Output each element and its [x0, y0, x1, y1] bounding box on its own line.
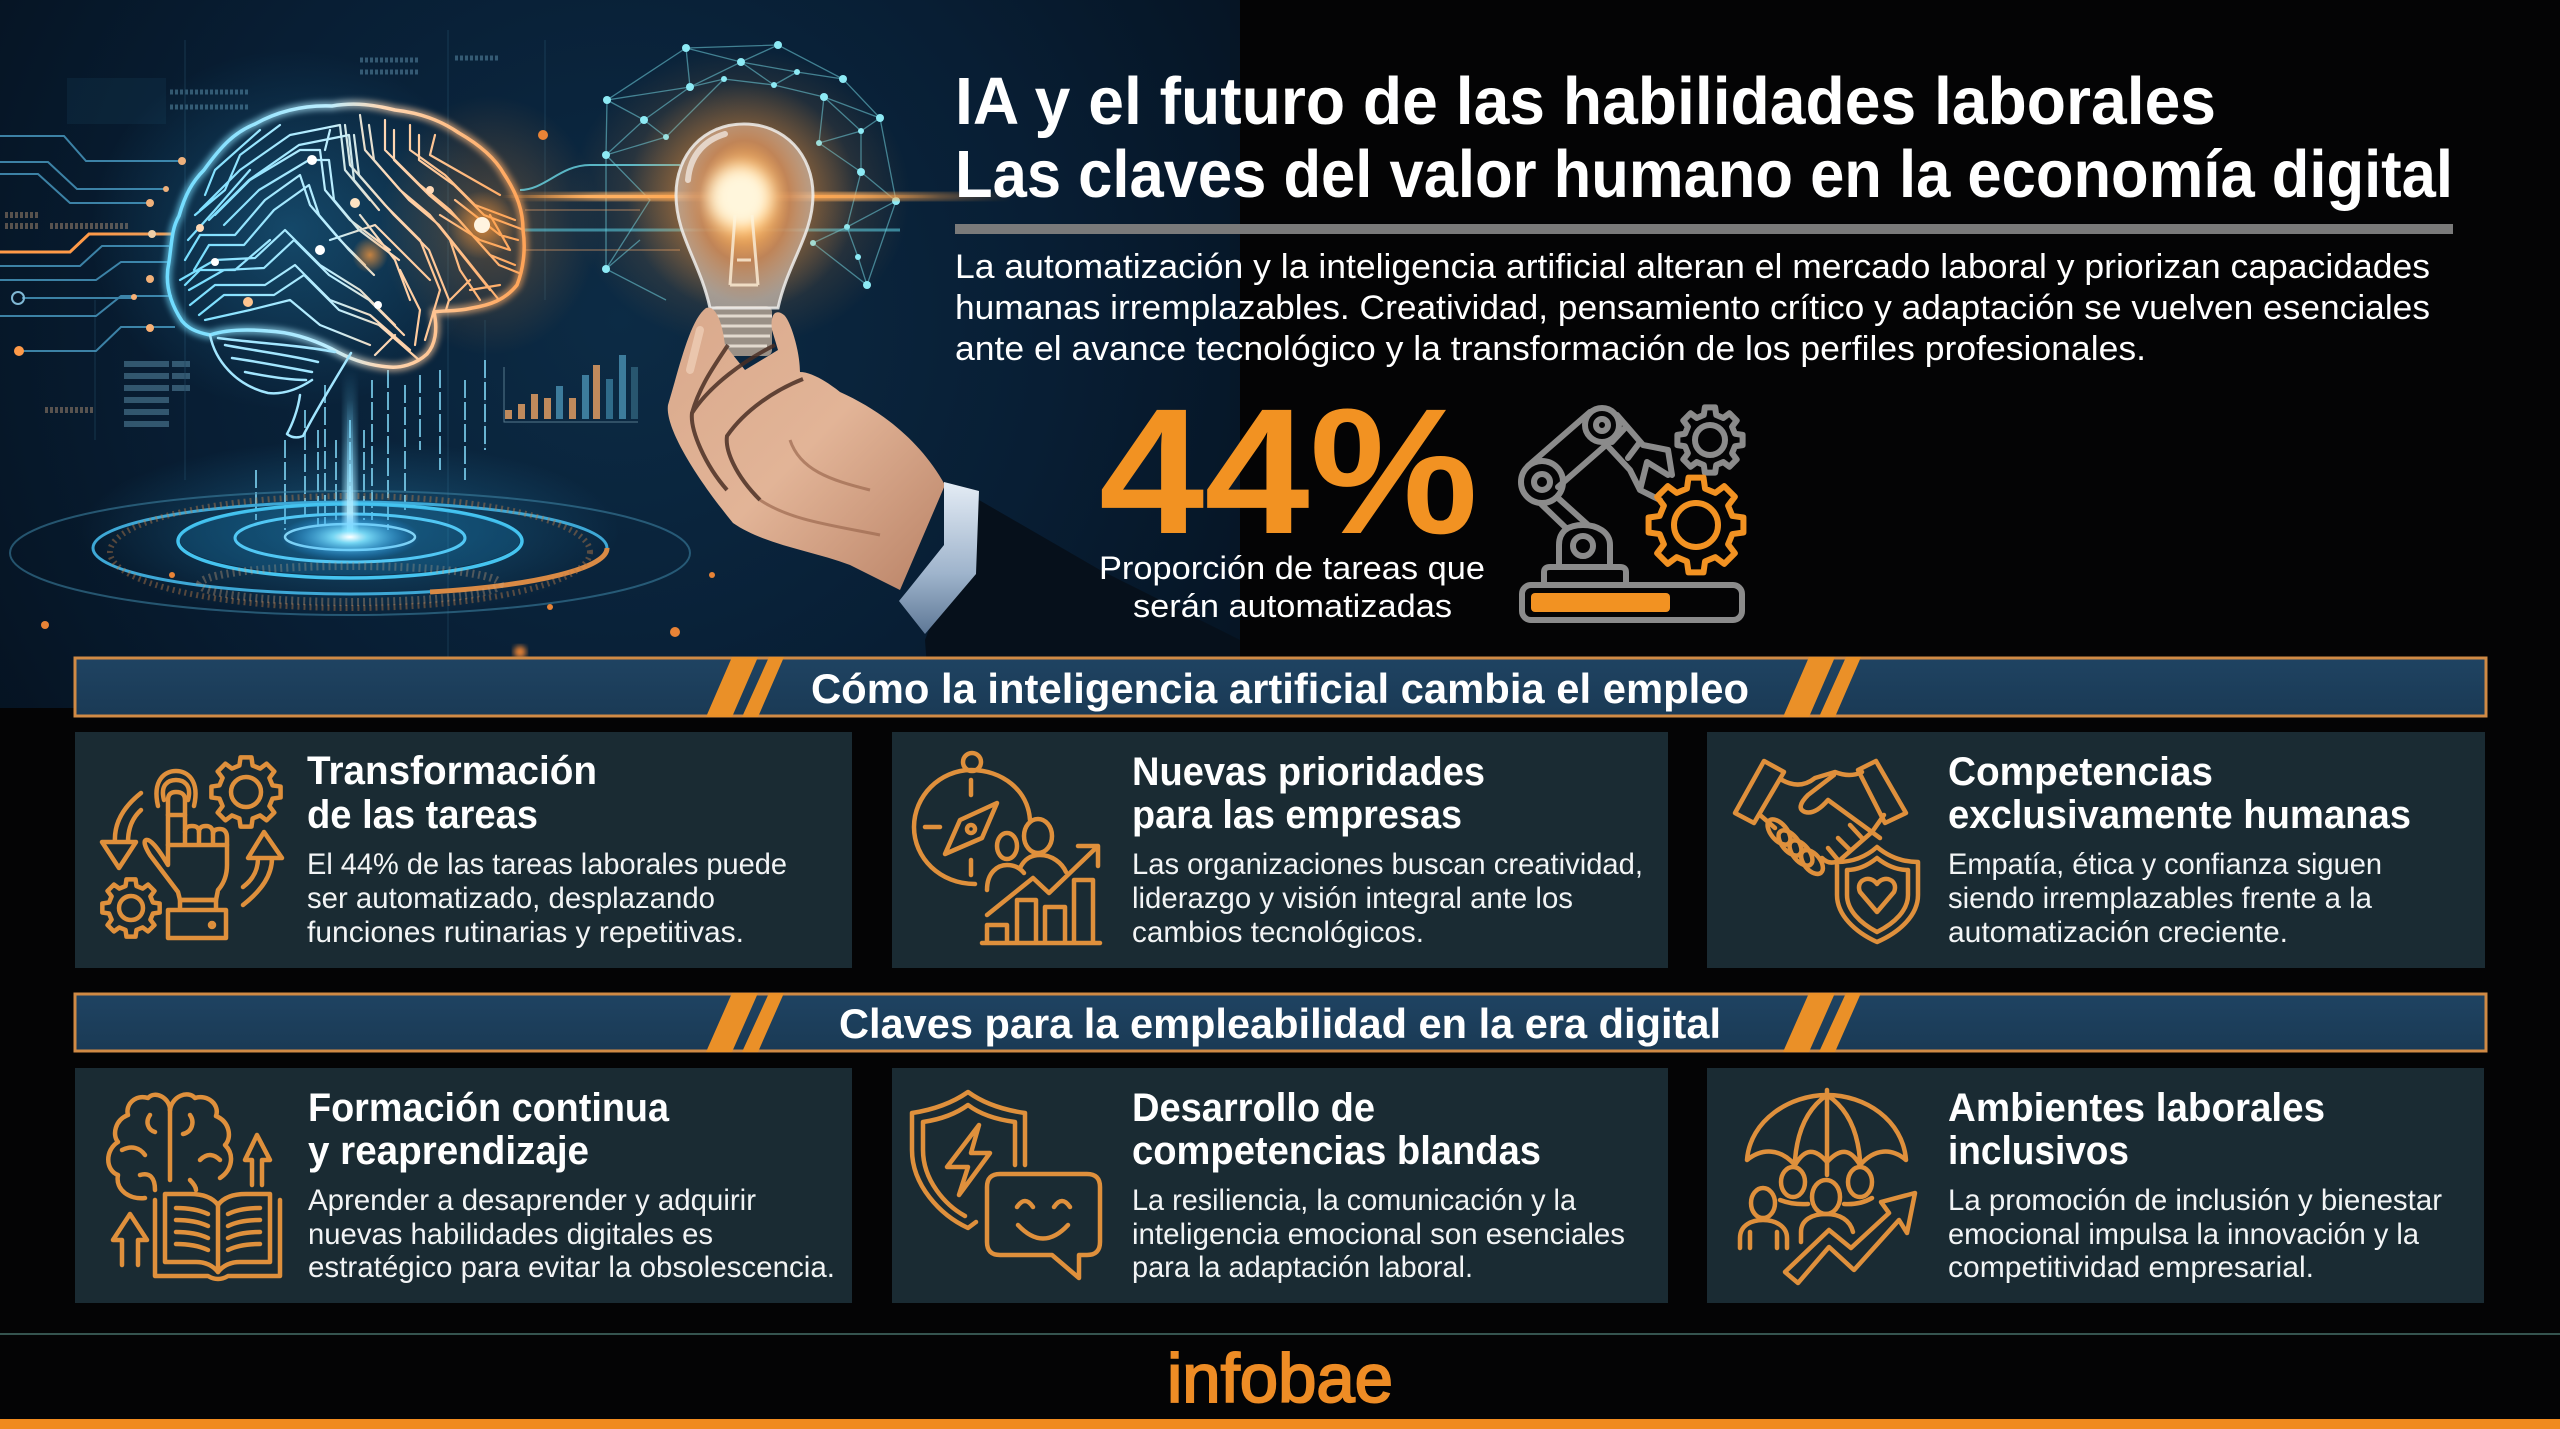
card heading: Formación continua	[308, 1086, 670, 1130]
intro paragraph: humanas irremplazables. Creatividad, pensamiento crítico y adaptación se vuelven esenciales	[955, 289, 2430, 327]
big stat 44%: 44%	[1099, 371, 1478, 571]
bulb base	[711, 306, 772, 356]
icon: umbrella over people with rising arrow	[1740, 1090, 1915, 1283]
icon: robot hand with gears	[102, 757, 282, 938]
bulb glass	[676, 124, 813, 308]
icon: handshake and heart shield	[1735, 761, 1918, 942]
hero illustration: brain and light bulb	[0, 0, 1240, 708]
card: competencias exclusivamente humanas: exclusivamente humanas	[1948, 793, 2411, 837]
brain outline	[167, 104, 524, 367]
stat caption: serán automatizadas	[1133, 588, 1452, 624]
card heading: Nuevas prioridades	[1132, 750, 1485, 794]
card: ambientes laborales inclusivos: competitividad empresarial.	[1948, 1251, 2314, 1284]
title: IA y el futuro de las habilidades laborales	[955, 64, 2216, 139]
orange sparks	[41, 130, 715, 658]
right slashes	[1783, 657, 1861, 717]
holographic disk	[10, 370, 690, 615]
light beams from brain to bulb	[500, 165, 1010, 250]
card: competencias blandas	[892, 1068, 1668, 1303]
card: ambientes laborales inclusivos: inclusivos	[1948, 1129, 2129, 1173]
card: transformacion de las tareas: ser automatizado, desplazando	[307, 882, 715, 915]
card body: La resiliencia, la comunicación y la	[1132, 1184, 1576, 1217]
card body: Aprender a desaprender y adquirir	[308, 1184, 756, 1217]
title	[955, 64, 2453, 212]
circuit lines entering the brain	[0, 136, 186, 356]
icon: compass, people and growth chart	[914, 753, 1100, 943]
card: competencias blandas: para la adaptación laboral.	[1132, 1251, 1473, 1284]
brain circuit traces	[180, 115, 524, 360]
right slashes	[1783, 993, 1861, 1052]
card: competencias exclusivamente humanas: automatización creciente.	[1948, 916, 2288, 949]
left slashes	[706, 657, 784, 717]
palm creases	[760, 440, 880, 535]
section banner: claves para la empleabilidad	[75, 993, 2486, 1052]
light bulb	[627, 82, 857, 356]
hero background	[0, 0, 1240, 708]
icon: robot arm with gears	[1521, 407, 1743, 620]
card heading: Desarrollo de	[1132, 1086, 1375, 1130]
card: nuevas prioridades	[892, 732, 1668, 968]
card: competencias blandas: inteligencia emocional son esenciales	[1132, 1218, 1625, 1251]
hand silhouette	[668, 308, 945, 590]
data rain	[256, 360, 485, 530]
card heading: Competencias	[1948, 750, 2213, 794]
icon: shield with bolt and smiling chat bubble	[912, 1092, 1100, 1278]
sleeve	[925, 500, 1240, 656]
bar chart	[504, 355, 638, 422]
card body: El 44% de las tareas laborales puede	[307, 848, 787, 881]
card: nuevas prioridades: cambios tecnológicos.	[1132, 916, 1424, 949]
intro paragraph: La automatización y la inteligencia artificial alteran el mercado laboral y priorizan capacidades	[955, 248, 2430, 286]
brain sparkles	[196, 155, 516, 309]
card: nuevas prioridades: liderazgo y visión integral ante los	[1132, 882, 1573, 915]
card body: Las organizaciones buscan creatividad,	[1132, 848, 1643, 881]
brain glow	[167, 104, 524, 367]
card: competencias blandas: competencias blandas	[1132, 1129, 1541, 1173]
stat caption: Proporción de tareas que	[1099, 550, 1485, 586]
stat caption	[1099, 550, 1485, 624]
halos	[80, 47, 910, 620]
card: formacion continua: nuevas habilidades digitales es	[308, 1218, 713, 1251]
neural network mesh	[602, 41, 900, 300]
card: transformacion de las tareas: de las tareas	[307, 793, 538, 837]
data panels	[5, 30, 545, 680]
bulb halo	[634, 88, 851, 300]
card: transformacion de las tareas	[75, 732, 852, 968]
footer rule	[0, 1333, 2560, 1335]
card: nuevas prioridades: para las empresas	[1132, 793, 1462, 837]
hand	[668, 308, 945, 590]
card: competencias exclusivamente humanas	[1707, 732, 2485, 968]
card: transformacion de las tareas: funciones rutinarias y repetitivas.	[307, 916, 744, 949]
card body: La promoción de inclusión y bienestar	[1948, 1184, 2442, 1217]
cerebellum and stem	[210, 335, 351, 437]
left slashes	[706, 993, 784, 1052]
finger gaps	[692, 345, 803, 500]
card heading: Ambientes laborales	[1948, 1086, 2325, 1130]
icon: brain, book and arrows	[108, 1094, 280, 1279]
card: competencias exclusivamente humanas: siendo irremplazables frente a la	[1948, 882, 2372, 915]
intro paragraph: ante el avance tecnológico y la transformación de los perfiles profesionales.	[955, 330, 2146, 368]
card body: Empatía, ética y confianza siguen	[1948, 848, 2382, 881]
banner heading: Cómo la inteligencia artificial cambia el empleo	[811, 665, 1749, 712]
title divider	[955, 224, 2453, 234]
section banner: como la IA cambia el empleo	[75, 657, 2486, 717]
shirt cuff	[899, 482, 979, 634]
card heading: Transformación	[307, 749, 597, 793]
base with progress bar	[1522, 585, 1742, 620]
banner heading: Claves para la empleabilidad en la era digital	[839, 1000, 1721, 1047]
bulb core	[708, 165, 772, 229]
card: ambientes laborales inclusivos: emocional impulsa la innovación y la	[1948, 1218, 2419, 1251]
logo: infobae: infobae	[1167, 1340, 1393, 1417]
card: formacion continua: y reaprendizaje	[308, 1129, 589, 1173]
title: Las claves del valor humano en la economía digital	[955, 137, 2453, 212]
brain	[167, 104, 524, 437]
card: ambientes laborales inclusivos	[1707, 1068, 2484, 1303]
card: formacion continua: estratégico para evitar la obsolescencia.	[308, 1251, 835, 1284]
footer orange bar	[0, 1419, 2560, 1429]
intro paragraph	[955, 248, 2430, 368]
card: formacion continua	[75, 1068, 852, 1303]
